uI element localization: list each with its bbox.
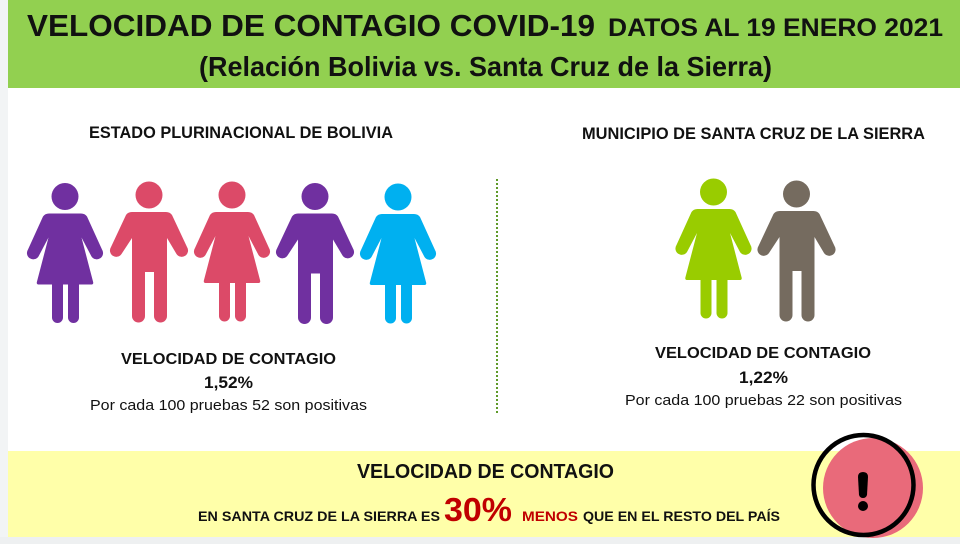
icon: purple woman (27, 183, 103, 323)
subtitle: (Relación Bolivia vs. Santa Cruz de la Sierra) (199, 51, 772, 82)
panel: Santa Cruz (582, 125, 925, 409)
text block: Santa Cruz rate: VELOCIDAD DE CONTAGIO (655, 345, 871, 362)
conclusion text (198, 491, 780, 528)
title (27, 8, 943, 43)
heading: Santa Cruz: MUNICIPIO DE SANTA CRUZ DE LA SIERRA (582, 125, 925, 143)
icon: blue woman (360, 184, 436, 324)
header band (8, 0, 960, 88)
text block: Bolivia rate: VELOCIDAD DE CONTAGIO (121, 351, 336, 368)
text block: Santa Cruz rate (625, 345, 902, 409)
panel: conclusion band (8, 435, 960, 538)
title: DATOS AL 19 ENERO 2021 (608, 14, 943, 42)
conclusion text: MENOS (522, 508, 578, 524)
conclusion text: EN SANTA CRUZ DE LA SIERRA ES (198, 508, 440, 524)
text block: Santa Cruz rate: 1,22% (739, 368, 788, 387)
text block: Bolivia rate: 1,52% (204, 373, 253, 392)
conclusion heading: VELOCIDAD DE CONTAGIO (357, 461, 614, 483)
icon: purple man (276, 183, 354, 324)
text block: Santa Cruz rate: Por cada 100 pruebas 22 son positivas (625, 392, 902, 409)
title: VELOCIDAD DE CONTAGIO COVID-19 (27, 8, 595, 43)
icon: red man (110, 182, 188, 322)
icon: green woman (675, 178, 752, 318)
text block: Bolivia rate (90, 351, 367, 414)
heading: Bolivia: ESTADO PLURINACIONAL DE BOLIVIA (89, 124, 393, 142)
icon: alert (814, 435, 923, 538)
conclusion text: 30% (444, 491, 512, 528)
panel: Bolivia (27, 124, 436, 414)
icon: red woman (194, 182, 270, 322)
conclusion text: QUE EN EL RESTO DEL PAÍS (583, 508, 780, 524)
icon: brown man (757, 180, 836, 322)
text block: Bolivia rate: Por cada 100 pruebas 52 son positivas (90, 397, 367, 414)
